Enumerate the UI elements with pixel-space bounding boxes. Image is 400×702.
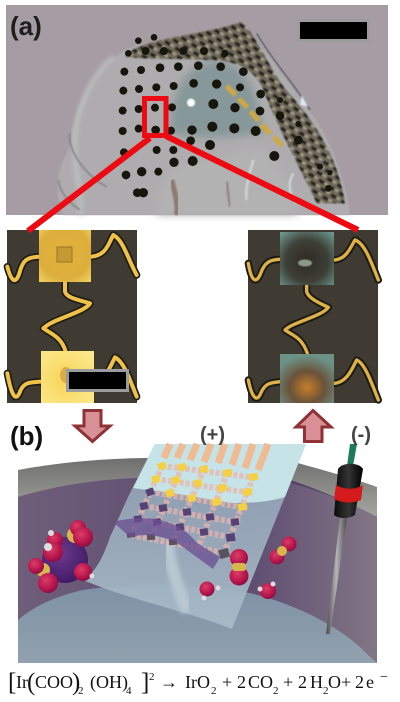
reaction equation: ( [27,669,35,696]
panel: left micrograph, gold [7,230,137,403]
label (b): (b) [10,421,43,451]
pink serpentine mesh [131,466,258,554]
reaction equation: COO [35,672,73,692]
molecule: water [200,582,220,600]
flexible sheet [83,444,306,629]
glass bulb [58,21,350,215]
reaction equation: − [380,670,388,685]
contact traces [164,444,268,470]
molecule: iridium complex [28,520,94,593]
reaction equation: H [310,672,323,692]
bowl floor [18,585,377,663]
counter electrode [326,444,363,634]
reaction equation: 2 [211,685,216,697]
scale bar [66,369,129,392]
reaction equation: 2 [237,672,246,692]
arrow: up [296,410,331,442]
reaction equation: → [160,672,178,692]
reaction equation: 2 [273,685,278,697]
reaction equation: 2 [149,671,154,683]
reaction equation: e [366,672,374,692]
reaction equation: CO [248,672,273,692]
reaction equation: 2 [355,672,364,692]
molecule: water [258,582,276,599]
label (-): (-) [351,424,371,446]
reaction equation: 2 [298,672,307,692]
dark submerged pads [134,487,239,542]
bowl rim [18,458,377,520]
scale bar [297,19,370,42]
panel: electrochemical cell illustration [18,444,377,663]
reaction equation: 4 [126,685,132,697]
textured strip of device on the far side [125,22,345,203]
reaction equation: (OH) [90,672,128,693]
reaction equation: ) [72,669,80,696]
bowl wall [18,478,377,663]
reaction equation: [ [8,669,16,696]
label (a): (a) [10,11,42,41]
reaction equation: + [222,672,232,692]
black contact dots [119,34,333,197]
arrow: down [75,410,110,442]
reaction equation: IrO [185,672,210,692]
molecule: CO2 [230,549,248,586]
molecule: CO2 [270,536,296,564]
panel: photo of device on curved glass [6,5,388,215]
reaction equation: 2 [323,685,328,697]
gold pads [151,461,259,511]
curved arrow on sheet [113,518,220,569]
reaction equation: + [283,672,293,692]
reaction equation: ] [141,669,149,696]
red selection box [144,98,166,136]
panel: right micrograph, oxidized [248,230,378,403]
reaction equation: Ir [16,672,28,692]
label (+): (+) [200,424,225,446]
reaction equation: O+ [328,672,351,692]
reaction equation: 2 [78,685,84,697]
zoom lines [28,136,358,231]
